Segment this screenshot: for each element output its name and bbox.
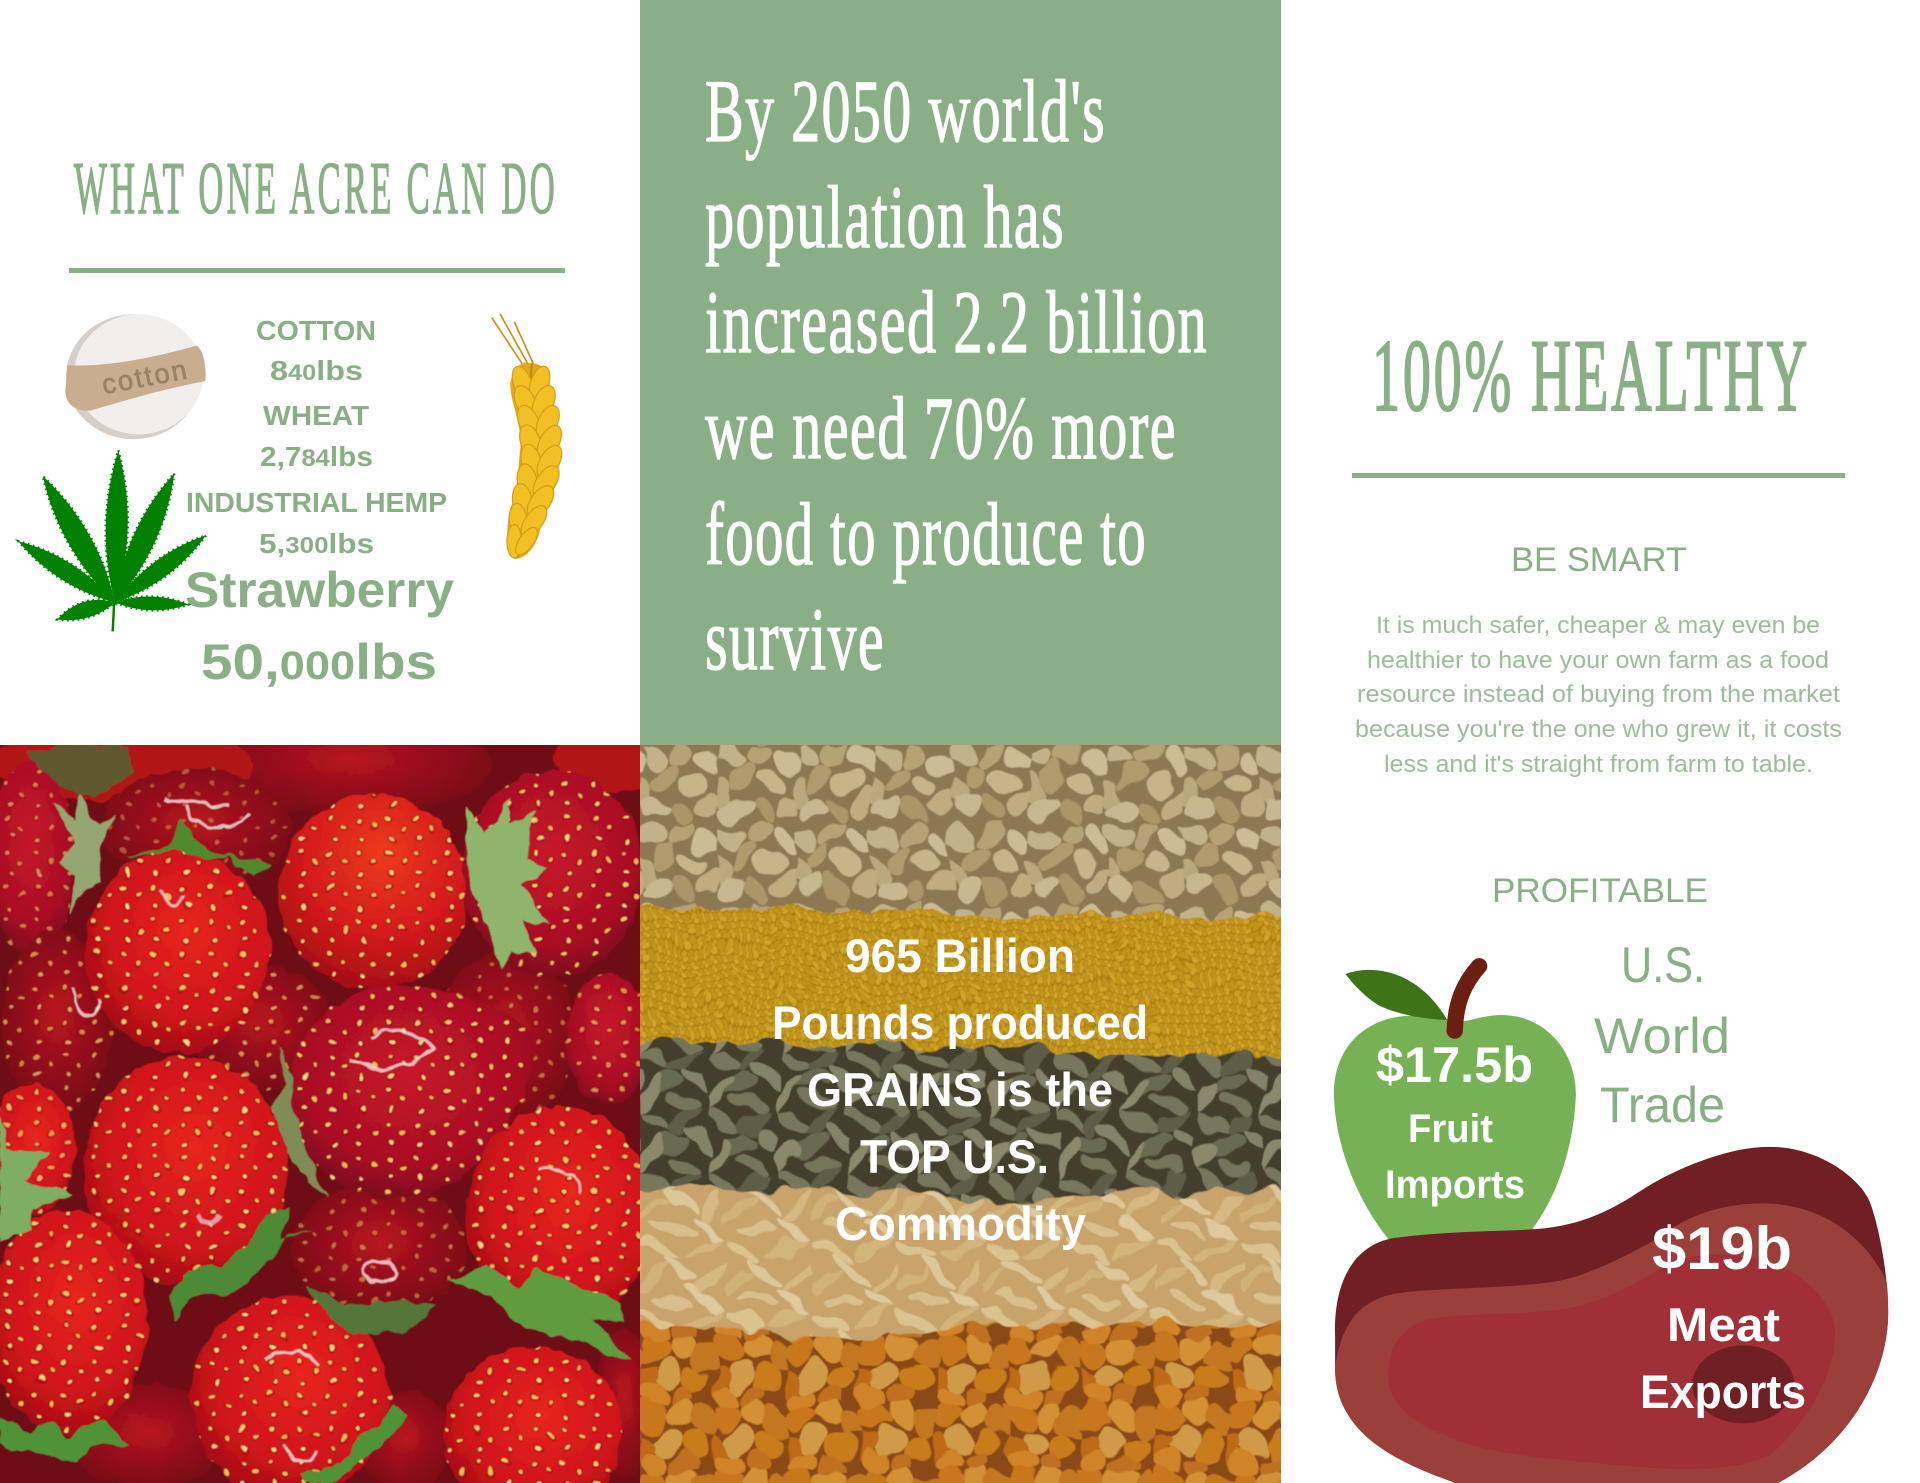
text: meat exports: Meat: [1667, 1298, 1780, 1351]
text: population statement: By 2050 world's: [705, 63, 1106, 161]
panel: 100% healthy: [1334, 319, 1888, 1483]
text: strawberry yield: Strawberry: [185, 562, 454, 618]
text: industrial hemp yield: [186, 487, 447, 559]
text: u.s. world trade: World: [1594, 1008, 1730, 1064]
text: population statement: food to produce to: [705, 486, 1147, 584]
text: fruit imports: Fruit: [1408, 1107, 1493, 1151]
photo: strawberries: [0, 745, 640, 1483]
text: population statement: we need 70% more: [705, 380, 1177, 478]
text: population statement: increased 2.2 billion: [705, 274, 1208, 372]
text: meat exports: [1640, 1215, 1806, 1418]
icon: meat steak: [1335, 1147, 1888, 1483]
band: rye: [624, 1032, 1298, 1199]
text: u.s. world trade: U.S.: [1621, 937, 1705, 993]
text: be smart paragraph: [1355, 612, 1842, 778]
text: be smart paragraph: It is much safer, cheaper & may even be: [1376, 612, 1820, 639]
icon: green apple: [1334, 966, 1576, 1241]
band: corn: [624, 1300, 1298, 1483]
band: rice: [624, 1178, 1298, 1339]
text: be smart paragraph: because you're the one who grew it, it costs: [1355, 716, 1842, 743]
subheading: profitable: PROFITABLE: [1492, 872, 1708, 910]
icon: cotton bale: [65, 314, 206, 439]
text: meat exports: $19b: [1652, 1215, 1792, 1282]
text: grains commodity: GRAINS is the: [807, 1063, 1113, 1116]
icon: wheat ear: [492, 314, 567, 559]
text: strawberry yield: 50,000lbs: [201, 634, 437, 690]
illustrations: apple and meat: [1334, 958, 1888, 1483]
icons: cotton, hemp and wheat: [15, 314, 562, 632]
text: population statement: [705, 63, 1208, 689]
band: barley: [624, 726, 1298, 919]
text: industrial hemp yield: 5,300lbs: [259, 528, 374, 559]
text: be smart paragraph: less and it's straight from farm to table.: [1384, 751, 1813, 778]
text: cotton yield: [256, 315, 376, 386]
text: population statement: survive: [705, 591, 885, 689]
icon: hemp leaf: [18, 450, 206, 631]
icon: cotton bale: cotton: [99, 354, 191, 400]
text: u.s. world trade: [1594, 937, 1730, 1133]
text: meat exports: Exports: [1640, 1365, 1806, 1418]
text: cotton yield: COTTON: [256, 315, 376, 346]
text: grains commodity: 965 Billion: [845, 929, 1075, 982]
text: be smart paragraph: healthier to have your own farm as a food: [1367, 647, 1829, 674]
text: grains commodity: Pounds produced: [772, 996, 1148, 1049]
text: be smart paragraph: resource instead of buying from the market: [1357, 681, 1840, 708]
text: fruit imports: Imports: [1385, 1163, 1525, 1207]
text: fruit imports: [1376, 1037, 1533, 1207]
band: millet: [624, 905, 1298, 1060]
text: cotton yield: 840lbs: [270, 355, 363, 386]
photo: grains: [640, 745, 1281, 1483]
text: grains commodity: TOP U.S.: [860, 1130, 1049, 1183]
text: wheat yield: 2,784lbs: [260, 441, 373, 472]
text: grains commodity: [772, 929, 1148, 1250]
text: industrial hemp yield: INDUSTRIAL HEMP: [186, 487, 447, 518]
text: population statement: population has: [705, 169, 1065, 267]
text: strawberry yield: [185, 562, 454, 690]
text: wheat yield: WHEAT: [263, 400, 369, 431]
text: WHAT ONE ACRE CAN DO: [74, 148, 558, 230]
panel: what one acre can do: [18, 148, 567, 690]
text: grains commodity: Commodity: [835, 1197, 1086, 1250]
text: fruit imports: $17.5b: [1376, 1037, 1533, 1093]
text: u.s. world trade: Trade: [1600, 1077, 1725, 1133]
subheading: be smart: BE SMART: [1511, 541, 1687, 579]
text: wheat yield: [260, 400, 373, 472]
panel: population headline: [640, 0, 1281, 745]
